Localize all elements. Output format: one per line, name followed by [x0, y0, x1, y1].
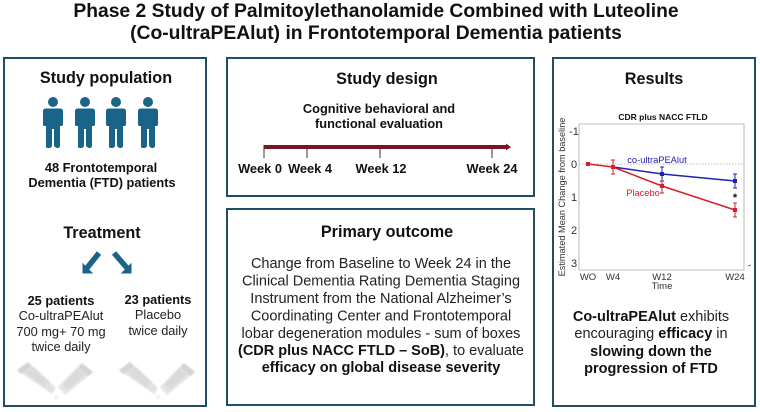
series: co-ultraPEAlut: co-ultraPEAlut	[627, 155, 687, 165]
series: co-ultraPEAlut	[611, 155, 737, 188]
text: co-ultraPEAlut arm: twice daily	[31, 339, 91, 354]
panel: study design	[227, 58, 534, 196]
heading: study population: Study population	[40, 69, 172, 87]
line chart	[557, 112, 751, 292]
panel: primary outcome	[227, 209, 534, 405]
panel: results	[553, 58, 755, 406]
icon: arrow to treatment arm	[83, 253, 99, 273]
text: placebo arm: Placebo	[135, 307, 181, 322]
text: evaluation	[303, 101, 455, 131]
y axis: 0	[571, 159, 577, 171]
y axis: Estimated Mean Change from baseline	[557, 118, 567, 276]
text: outcome description: Change from Baseline to Week 24 in the	[251, 256, 511, 272]
heading: results: Results	[625, 70, 683, 88]
text: conclusion: Co-ultraPEAlut exhibits	[573, 309, 729, 325]
x axis: W24	[725, 272, 745, 283]
timeline	[238, 144, 518, 176]
text: outcome description: Instrument from the National Alzheimer’s	[250, 291, 512, 307]
text: patient count: 48 Frontotemporal	[45, 160, 157, 175]
x axis: WO	[580, 272, 596, 283]
series: placebo: Placebo	[626, 188, 660, 198]
text: outcome description: efficacy on global disease severity	[262, 360, 500, 376]
x axis	[580, 272, 745, 292]
x axis: Time	[652, 281, 672, 292]
text: conclusion: progression of FTD	[584, 361, 718, 377]
x axis: W4	[606, 272, 620, 283]
heading: study design: Study design	[336, 70, 438, 88]
text: co-ultraPEAlut arm: 25 patients	[28, 293, 94, 308]
text: outcome description: Clinical Dementia Rating Dementia Staging	[242, 274, 520, 290]
icon: arrow to placebo arm	[114, 253, 131, 273]
y axis: 2	[571, 225, 577, 237]
panel: study population and treatment	[4, 58, 206, 406]
series: placebo	[586, 160, 737, 217]
text: outcome description	[238, 256, 524, 376]
text: outcome description: (CDR plus NACC FTLD – SoB), to evaluate	[238, 343, 524, 359]
text: evaluation: Cognitive behavioral and	[303, 101, 455, 116]
y axis: -1	[569, 126, 579, 138]
text: co-ultraPEAlut arm	[16, 293, 106, 354]
text: placebo arm: 23 patients	[125, 292, 191, 307]
text: outcome description: Coordinating Center and Frontotemporal	[251, 308, 511, 324]
timeline: Week 4	[288, 161, 333, 176]
text: placebo arm: twice daily	[128, 323, 188, 338]
significance marker: *	[733, 192, 738, 204]
y axis: 1	[571, 192, 577, 204]
x axis: W12	[652, 272, 672, 283]
text: patient count: Dementia (FTD) patients	[28, 175, 176, 190]
heading: treatment: Treatment	[63, 224, 141, 242]
title: (Co-ultraPEAlut) in Frontotemporal Dementia patients	[130, 23, 622, 44]
chart title: CDR plus NACC FTLD	[618, 112, 708, 122]
title: Phase 2 Study of Palmitoylethanolamide Combined with Luteoline	[73, 1, 679, 22]
text: conclusion: encouraging efficacy in	[574, 326, 728, 342]
timeline: Week 12	[356, 161, 406, 176]
text: conclusion: slowing down the	[590, 344, 712, 360]
timeline: Week 24	[466, 161, 518, 176]
y axis: 3	[571, 258, 577, 270]
text: conclusion	[573, 309, 729, 377]
title	[73, 1, 679, 44]
heading: primary outcome: Primary outcome	[321, 223, 453, 241]
text: co-ultraPEAlut arm: 700 mg+ 70 mg	[16, 324, 106, 339]
icon: four patients	[43, 97, 158, 148]
timeline: Week 0	[238, 161, 282, 176]
text: patient count	[28, 160, 176, 190]
text: placebo arm	[125, 292, 191, 338]
y axis	[557, 118, 579, 276]
text: outcome description: lobar degeneration modules - sum of boxes	[242, 326, 520, 342]
icon: sachets, placebo arm	[119, 362, 195, 399]
icon: sachets, treatment arm	[17, 362, 93, 399]
text: co-ultraPEAlut arm: Co-ultraPEAlut	[19, 308, 104, 323]
text: evaluation: functional evaluation	[315, 116, 443, 131]
